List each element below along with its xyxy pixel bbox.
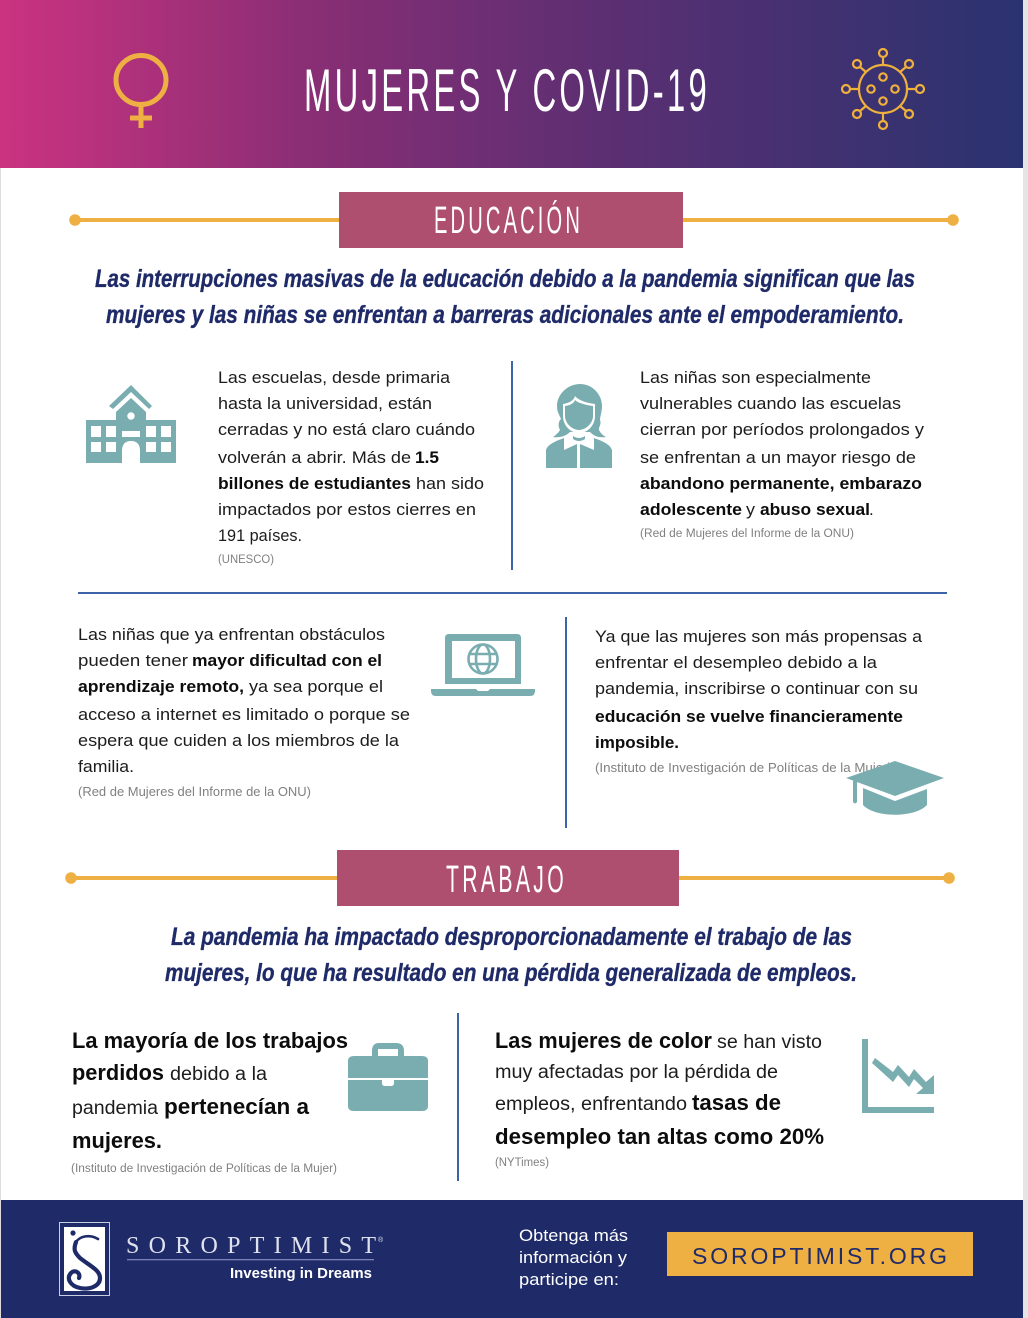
text block: jobs lost: (Instituto de Investigación de Políticas de la Mujer)	[71, 1163, 337, 1175]
text block: remote learning: ya sea porque el	[249, 677, 383, 696]
text block: schools closed: volverán a abrir. Más de	[218, 448, 411, 467]
logo: wordmark: Investing in Dreams	[230, 1266, 372, 1282]
text block: women of color: Las mujeres de color	[495, 1028, 712, 1053]
logo: wordmark: ®	[378, 1236, 384, 1244]
text block: remote learning: Las niñas que ya enfrentan obstáculos	[78, 625, 385, 644]
icon: graduation cap	[846, 761, 944, 815]
text block: women of color: se han visto	[717, 1032, 822, 1053]
icon: female symbol	[116, 56, 166, 128]
text block: unemployment and education: pandemia, inscribirse o continuar con su	[595, 679, 918, 698]
text block: unemployment and education: enfrentar el desempleo debido a la	[595, 653, 878, 672]
text block: vulnerable girls: abandono permanente, embarazo	[640, 474, 922, 493]
icon: girl	[546, 384, 612, 468]
text block: vulnerable girls: cierran por períodos prolongados y	[640, 420, 925, 439]
section heading: trabajo: TRABAJO	[446, 859, 567, 901]
text block: remote learning: (Red de Mujeres del Informe de la ONU)	[78, 784, 311, 799]
education headline	[95, 265, 915, 329]
logo: soroptimist emblem	[60, 1222, 110, 1296]
text block: women of color: muy afectadas por la pérdida de	[495, 1062, 778, 1083]
footer call to action text: Obtenga más	[519, 1226, 628, 1245]
text block: unemployment and education: imposible.	[595, 733, 679, 752]
footer call to action text	[519, 1226, 628, 1289]
text block: unemployment and education: Ya que las mujeres son más propensas a	[595, 627, 923, 646]
text block: women of color: empleos, enfrentando	[495, 1094, 687, 1115]
text block: women of color: (NYTimes)	[495, 1157, 549, 1169]
text block: jobs lost: pertenecían a	[164, 1094, 310, 1119]
header banner	[0, 0, 1023, 168]
text block: schools closed: cerradas y no está claro cuándo	[218, 420, 475, 439]
text block: unemployment and education	[595, 627, 923, 775]
website button	[667, 1232, 973, 1276]
work headline: mujeres, lo que ha resultado en una pérdida generalizada de empleos.	[165, 959, 857, 987]
text block: remote learning: familia.	[78, 757, 134, 776]
section heading: educación: EDUCACIÓN	[434, 199, 583, 242]
icon: laptop	[431, 634, 535, 696]
text block: vulnerable girls: y	[746, 500, 756, 519]
text block: schools closed	[218, 368, 484, 566]
text block: vulnerable girls: .	[869, 500, 874, 519]
logo: wordmark	[126, 1233, 384, 1282]
text block: vulnerable girls: adolescente	[640, 500, 742, 519]
text block: remote learning: espera que cuiden a los miembros de la	[78, 731, 400, 750]
text block: schools closed: billones de estudiantes	[218, 474, 411, 493]
section heading: trabajo	[65, 850, 955, 906]
icon: virus	[842, 49, 924, 129]
text block: vulnerable girls: vulnerables cuando las escuelas	[640, 394, 901, 413]
text block: vulnerable girls	[640, 368, 925, 540]
text block: remote learning: aprendizaje remoto,	[78, 677, 244, 696]
icon: declining chart	[862, 1039, 934, 1113]
text block: women of color: tasas de	[692, 1090, 781, 1115]
work headline	[165, 923, 857, 987]
text block: vulnerable girls: (Red de Mujeres del Informe de la ONU)	[640, 528, 854, 540]
text block: schools closed: 191 países.	[218, 526, 302, 545]
text block: remote learning	[78, 625, 410, 799]
icon: briefcase	[348, 1043, 428, 1111]
text block: vulnerable girls: abuso sexual	[760, 500, 870, 519]
text block: vulnerable girls: Las niñas son especialmente	[640, 368, 871, 387]
website button: SOROPTIMIST.ORG	[692, 1243, 947, 1269]
text block: jobs lost: perdidos	[72, 1060, 164, 1085]
icon: school	[86, 385, 176, 463]
text block: remote learning: pueden tener	[78, 651, 188, 670]
text block: jobs lost: pandemia	[72, 1098, 158, 1119]
text block: vulnerable girls: se enfrentan a un mayor riesgo de	[640, 448, 916, 467]
footer call to action text: información y	[519, 1248, 628, 1267]
work headline: La pandemia ha impactado desproporcionadamente el trabajo de las	[171, 923, 852, 951]
text block: schools closed: impactados por estos cierres en	[218, 500, 476, 519]
title: MUJERES Y COVID-19	[304, 57, 710, 124]
text block: remote learning: acceso a internet es limitado o porque se	[78, 705, 410, 724]
text block: unemployment and education: educación se vuelve financieramente	[595, 707, 903, 726]
text block: jobs lost: mujeres.	[72, 1128, 162, 1153]
footer call to action text: participe en:	[519, 1270, 619, 1289]
text block: jobs lost: La mayoría de los trabajos	[72, 1028, 348, 1053]
section heading: educación	[69, 192, 959, 248]
text block: schools closed: 1.5	[415, 448, 439, 467]
text block: schools closed: han sido	[416, 474, 484, 493]
text block: women of color	[495, 1028, 824, 1169]
text block: schools closed: hasta la universidad, están	[218, 394, 432, 413]
text block: remote learning: mayor dificultad con el	[192, 651, 382, 670]
text block: schools closed: (UNESCO)	[218, 554, 274, 566]
logo: wordmark: SOROPTIMIST	[126, 1233, 376, 1259]
footer	[1, 1200, 1023, 1318]
text block: schools closed: Las escuelas, desde primaria	[218, 368, 451, 387]
text block: jobs lost	[71, 1028, 348, 1175]
text block: unemployment and education: (Instituto de Investigación de Políticas de la Mujer)	[595, 760, 892, 775]
text block: jobs lost: debido a la	[170, 1064, 267, 1085]
text block: women of color: desempleo tan altas como 20%	[495, 1124, 824, 1149]
